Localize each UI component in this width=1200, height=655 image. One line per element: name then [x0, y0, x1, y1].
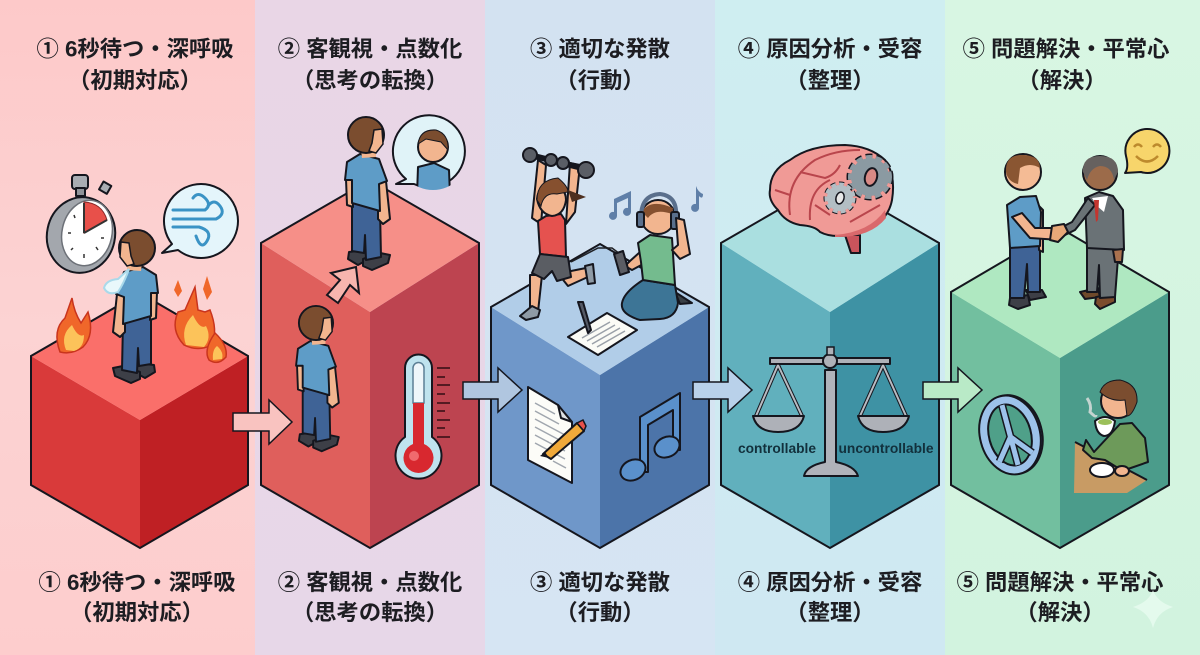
heading: step 1 top	[37, 36, 233, 93]
icon: wind speech bubble	[162, 184, 238, 258]
panel: cube 2	[261, 180, 479, 548]
heading: step 2 bottom: ② 客観視・点数化	[278, 570, 462, 595]
icon: large music note	[617, 393, 683, 485]
heading: step 1 bottom: ① 6秒待つ・深呼吸	[39, 570, 235, 595]
label: uncontrollable: uncontrollable	[838, 441, 934, 456]
figure: handshake men	[1005, 154, 1124, 309]
heading: step 4 top	[738, 36, 922, 93]
heading: step 1 top: （初期対応）	[68, 68, 202, 93]
icon: brain with gears	[770, 145, 893, 253]
heading: step 2 top: ② 客観視・点数化	[278, 36, 462, 62]
heading: step 3 bottom: （行動）	[555, 600, 645, 625]
heading: step 4 bottom: ④ 原因分析・受容	[738, 570, 922, 595]
icon: peace sign	[971, 388, 1051, 481]
figure: woman lifting dumbbell	[520, 148, 595, 320]
icon: smile bubble	[1125, 129, 1169, 173]
heading: step 4 top: ④ 原因分析・受容	[738, 36, 922, 62]
heading: step 1 bottom: （初期対応）	[70, 600, 204, 625]
heading: step 4 bottom: （整理）	[785, 600, 875, 625]
panel: cube 1	[31, 293, 248, 548]
heading: step 5 top	[963, 36, 1169, 93]
label: controllable: controllable	[738, 441, 816, 456]
figure: man drinking tea	[1074, 380, 1148, 493]
heading: step 4 top: （整理）	[785, 68, 875, 93]
arrow: step 2 to 3	[463, 368, 522, 412]
heading: step 5 bottom: ⑤ 問題解決・平常心	[957, 570, 1163, 595]
figure: person lower	[296, 306, 339, 451]
panel: cube 4	[721, 180, 939, 548]
arrow: step 3 to 4	[693, 368, 752, 412]
heading: step 5 bottom: （解決）	[1015, 600, 1105, 625]
icon: thermometer	[396, 354, 450, 479]
figure: man with headphones	[571, 194, 692, 320]
icon: self reflection bubble	[393, 115, 465, 195]
arrow: step 4 to 5	[923, 368, 982, 412]
heading: step 3 top: （行動）	[555, 68, 645, 93]
heading: step 3 bottom	[530, 570, 670, 625]
figure: person breathing	[113, 230, 158, 383]
heading: step 1 bottom	[39, 570, 235, 625]
figure: person on cube	[345, 117, 390, 270]
arrow: step 1 to 2	[233, 400, 292, 444]
heading: step 1 top: ① 6秒待つ・深呼吸	[37, 36, 233, 62]
heading: step 5 top: （解決）	[1017, 68, 1107, 93]
icon: flames right	[174, 276, 226, 362]
icon: paper on cube top	[568, 302, 637, 355]
heading: step 2 top: （思考の転換）	[292, 68, 448, 93]
heading: step 5 bottom	[957, 570, 1163, 625]
heading: step 2 top	[278, 36, 462, 93]
icon: balance scale	[753, 347, 909, 476]
arrow: diagonal up	[327, 267, 359, 303]
icon: small music notes	[609, 186, 703, 220]
panel: cube 3	[491, 244, 709, 548]
heading: step 3 bottom: ③ 適切な発散	[530, 570, 670, 595]
panel: cube 5	[951, 228, 1169, 548]
icon: sparkle watermark	[1133, 590, 1173, 628]
icon: document and pencil	[528, 387, 586, 483]
heading: step 3 top: ③ 適切な発散	[530, 36, 670, 62]
heading: step 2 bottom	[278, 570, 462, 625]
icon: stopwatch	[40, 175, 122, 279]
icon: breath	[104, 269, 129, 293]
heading: step 2 bottom: （思考の転換）	[292, 600, 448, 625]
icon: flame left	[57, 298, 91, 353]
heading: step 4 bottom	[738, 570, 922, 625]
heading: step 3 top	[530, 36, 670, 93]
heading: step 5 top: ⑤ 問題解決・平常心	[963, 36, 1169, 62]
